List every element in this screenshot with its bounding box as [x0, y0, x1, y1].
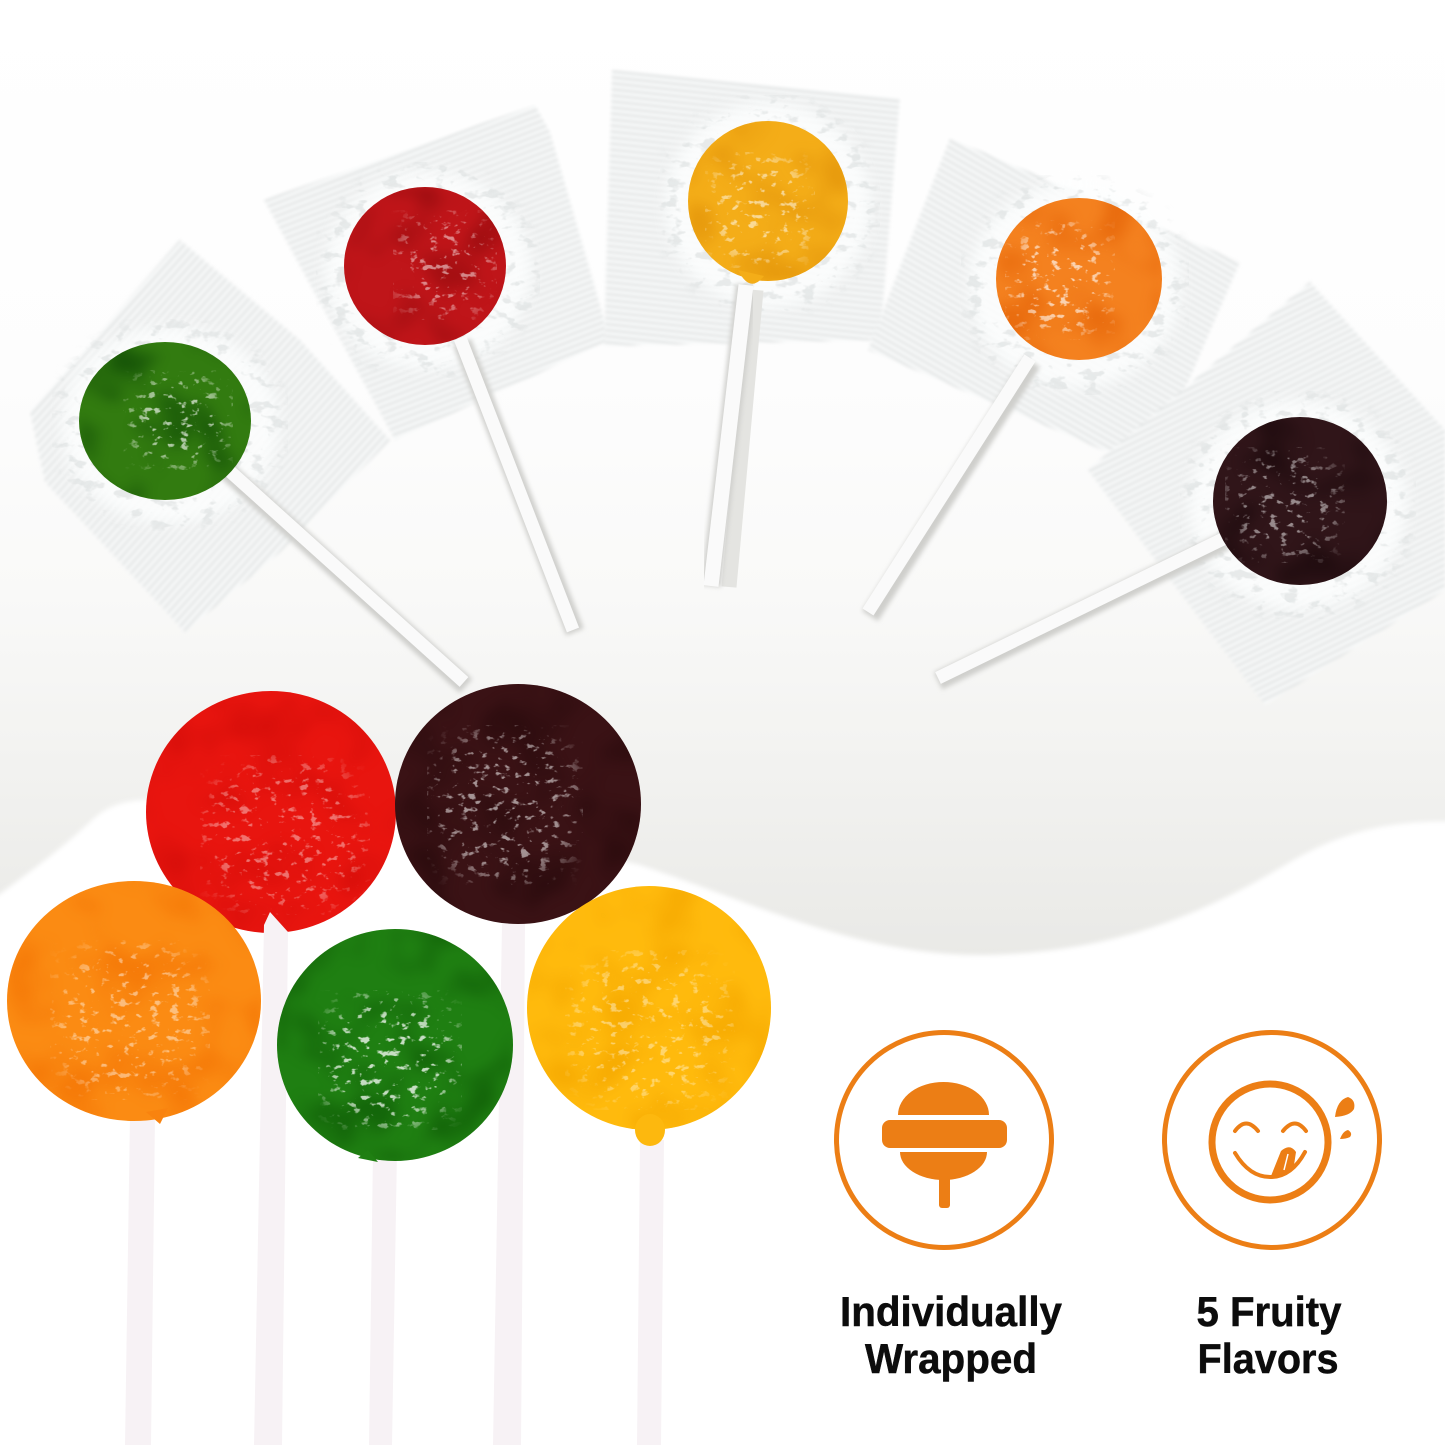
label: Wrapped: Wrapped [865, 1335, 1037, 1382]
label: Flavors: Flavors [1198, 1335, 1338, 1382]
wrapped green lollipop [30, 240, 466, 686]
label: 5 Fruity: 5 Fruity [1196, 1288, 1342, 1335]
unwrapped lollipop group [7, 684, 771, 1445]
stick: red lollipop [254, 912, 288, 1445]
wrapped yellow lollipop [604, 70, 900, 587]
wrapped red lollipop [264, 105, 610, 632]
icon: smiling face [1164, 1032, 1380, 1248]
lollipop: green [277, 929, 513, 1162]
lollipop: orange [7, 881, 261, 1124]
lollipop: dark purple [395, 684, 641, 924]
wrapped lollipops row [30, 70, 1445, 705]
stick: orange lollipop [125, 1115, 155, 1445]
wrapped purple lollipop [938, 282, 1445, 705]
icon: wrapped lollipop [836, 1032, 1052, 1248]
stick: green lollipop [369, 1150, 397, 1445]
wrapped orange lollipop [868, 138, 1240, 616]
label: Individually: Individually [840, 1288, 1063, 1335]
lollipop: red [146, 691, 396, 933]
stick: yellow lollipop [637, 1140, 664, 1445]
stick: purple lollipop [493, 924, 525, 1445]
lollipop: yellow [527, 886, 771, 1146]
